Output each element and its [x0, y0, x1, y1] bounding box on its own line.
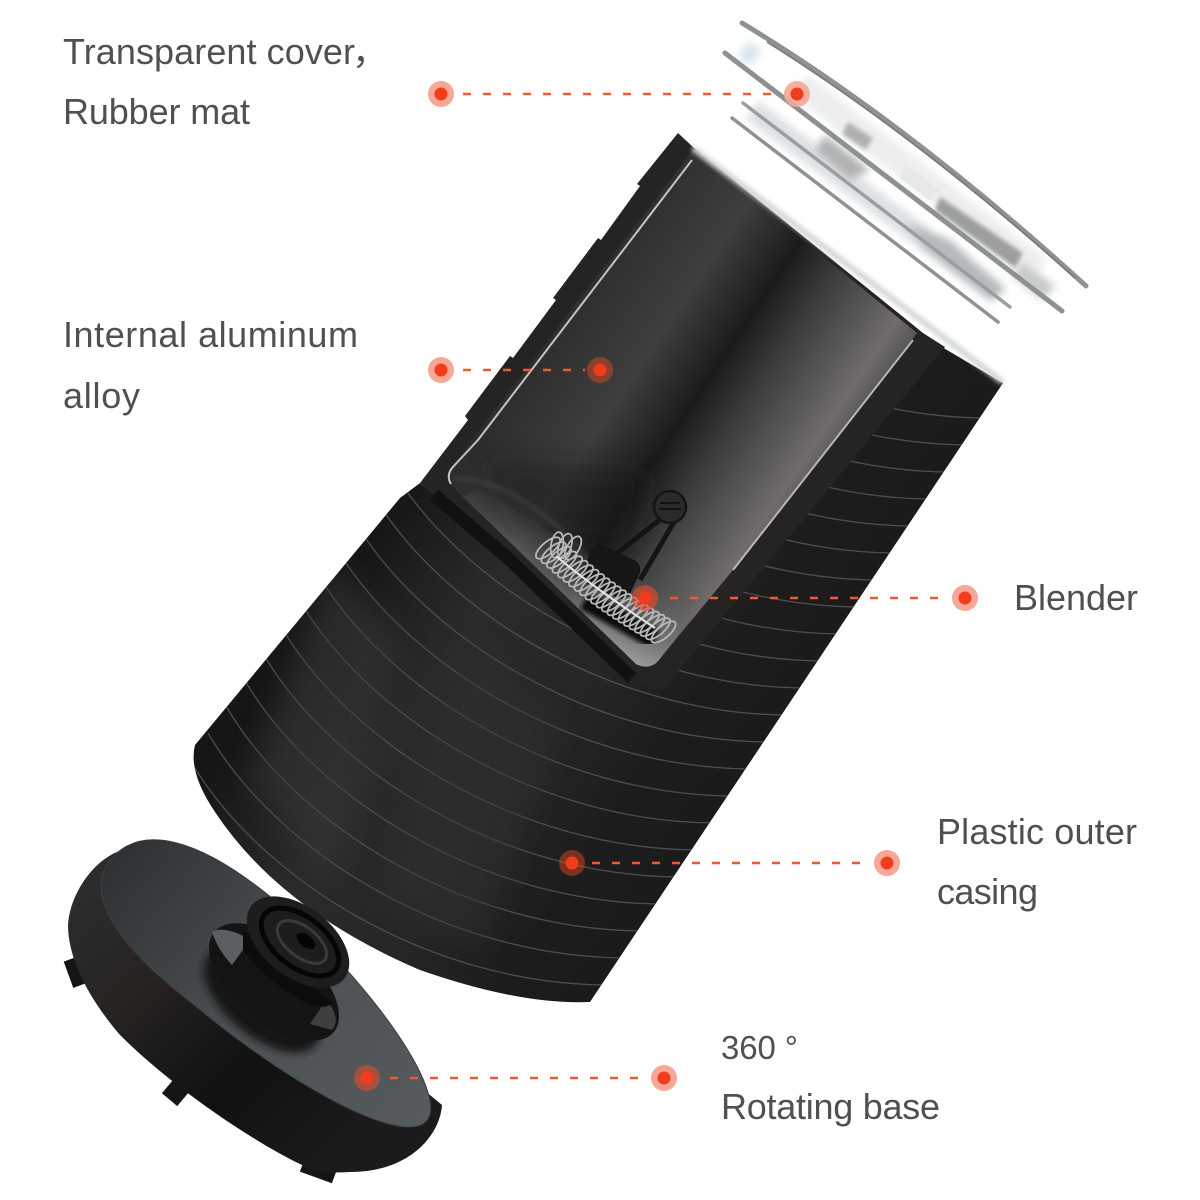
label text: alloy	[63, 375, 140, 416]
connector cone	[189, 901, 359, 1063]
connector cone shadow	[185, 927, 339, 1073]
label text: ，	[352, 31, 388, 72]
connector head	[243, 930, 333, 1007]
whisk shadow	[585, 600, 655, 640]
callout: plastic outer casing	[559, 811, 1137, 912]
cup side highlight lines	[449, 160, 692, 484]
label text	[937, 811, 1137, 912]
callout: internal aluminum alloy	[63, 314, 613, 416]
transparent lid with rubber mat	[725, 23, 1086, 322]
label text: casing	[937, 871, 1038, 912]
rotating base	[64, 803, 472, 1183]
label text: 360 °	[721, 1029, 798, 1066]
label text: Plastic outer	[937, 811, 1137, 852]
inner floor edge of the casing	[434, 495, 632, 678]
whisk shaft and hub	[579, 491, 686, 601]
label text	[721, 1029, 940, 1127]
lid translucent fills	[738, 40, 1056, 300]
whisk spring coil	[533, 531, 679, 646]
silver rim of the cup top	[693, 148, 1003, 382]
base side wall	[68, 848, 442, 1172]
callout: transparent cover and rubber mat	[63, 31, 810, 132]
whisk blender	[533, 491, 686, 646]
label text	[63, 314, 358, 416]
label text: Rotating base	[721, 1086, 940, 1127]
label text: Blender	[1014, 577, 1138, 618]
callout: blender	[632, 577, 1138, 618]
frother body: plastic outer casing	[194, 348, 1003, 1002]
base top face	[73, 803, 472, 1168]
callout: 360 degree rotating base	[354, 1029, 940, 1127]
label text: Transparent cover	[63, 31, 355, 72]
label text	[63, 31, 388, 132]
base feet	[64, 956, 338, 1183]
label text: Internal aluminum	[63, 314, 358, 355]
cut-away wall of the outer casing	[420, 133, 945, 690]
label text: Rubber mat	[63, 91, 250, 132]
internal aluminum alloy cup	[448, 150, 917, 690]
